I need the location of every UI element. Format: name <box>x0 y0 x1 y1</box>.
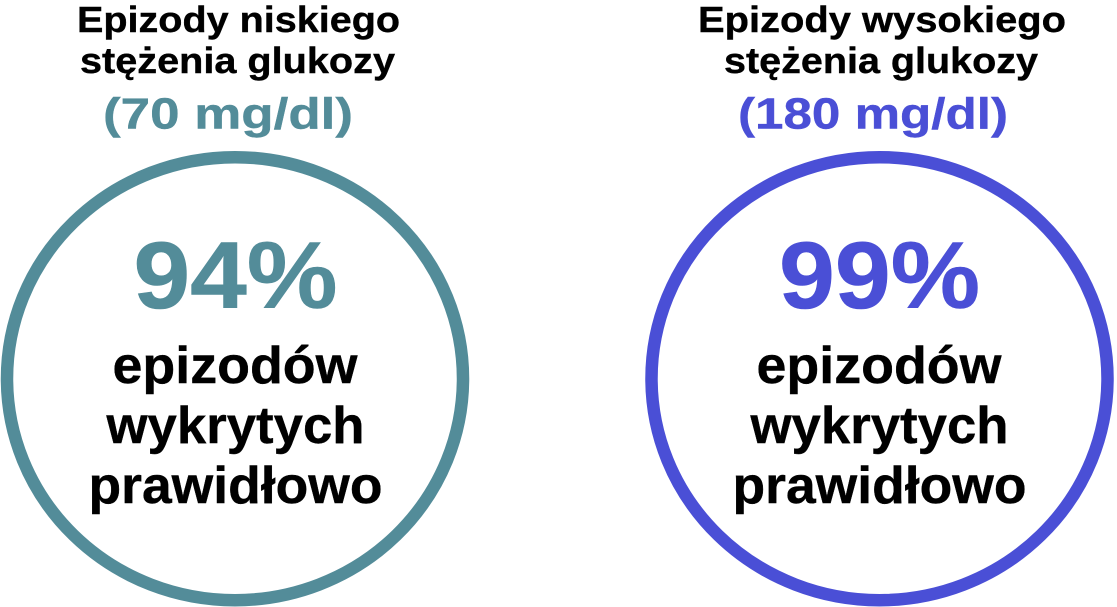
panel: high glucose <box>652 0 1108 600</box>
stat: 99%: 99% <box>779 223 980 329</box>
threshold: 180 mg/dl: (180 mg/dl) <box>738 90 1008 138</box>
threshold: 70 mg/dl: (70 mg/dl) <box>103 90 353 138</box>
description: high glucose <box>732 337 1026 515</box>
description: low glucose: epizodów <box>112 337 358 395</box>
heading: high glucose episodes: stężenia glukozy <box>724 40 1038 81</box>
description: low glucose: wykrytych <box>105 397 364 455</box>
heading: low glucose episodes: Epizody niskiego <box>77 0 400 40</box>
panel: low glucose <box>7 0 463 600</box>
heading: low glucose episodes <box>77 0 400 81</box>
description: high glucose: epizodów <box>756 337 1002 395</box>
heading: low glucose episodes: stężenia glukozy <box>80 40 395 81</box>
description: high glucose: wykrytych <box>749 397 1008 455</box>
circle: high glucose ring <box>652 157 1108 600</box>
description: low glucose <box>88 337 382 515</box>
stat: 94%: 94% <box>134 223 338 329</box>
heading: high glucose episodes: Epizody wysokiego <box>698 0 1066 40</box>
circle: low glucose ring <box>7 157 463 600</box>
description: low glucose: prawidłowo <box>88 457 382 515</box>
description: high glucose: prawidłowo <box>732 457 1026 515</box>
heading: high glucose episodes <box>698 0 1066 81</box>
